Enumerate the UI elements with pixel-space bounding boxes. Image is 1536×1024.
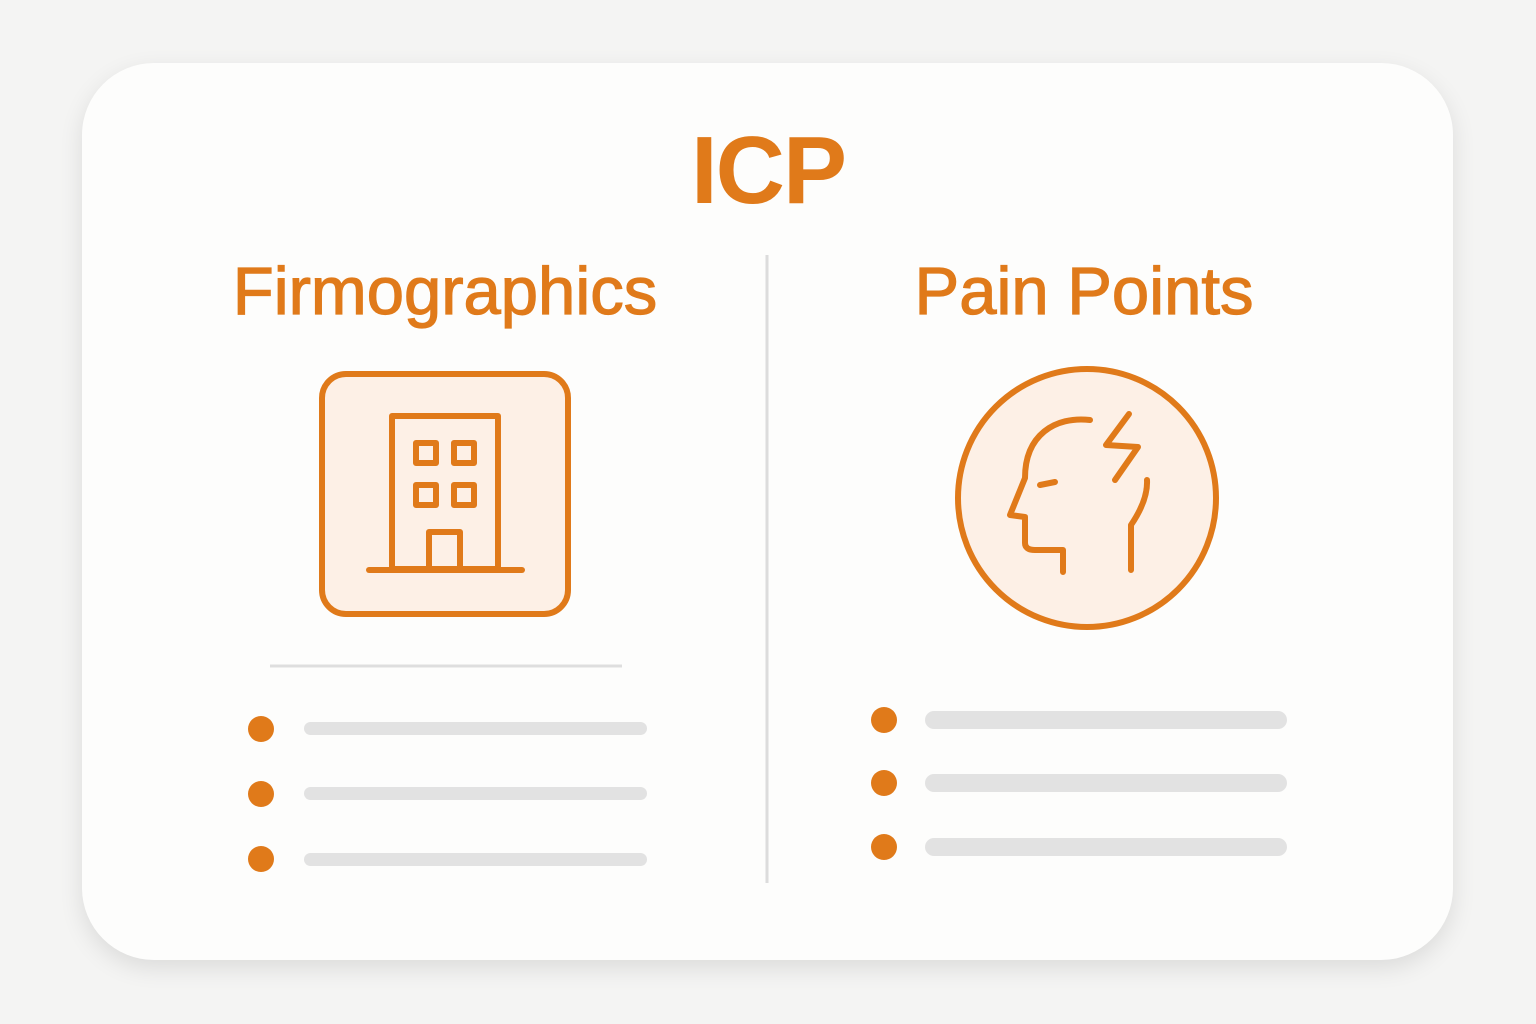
title: ICP (691, 117, 845, 224)
heading: Firmographics: Firmographics (233, 254, 657, 329)
heading: Pain Points: Pain Points (915, 254, 1253, 329)
list: firmographics bullets (248, 716, 647, 872)
icon: building (322, 374, 568, 614)
icon: head with lightning (958, 369, 1216, 627)
list: pain points bullets (871, 707, 1287, 860)
card panel (82, 63, 1453, 960)
